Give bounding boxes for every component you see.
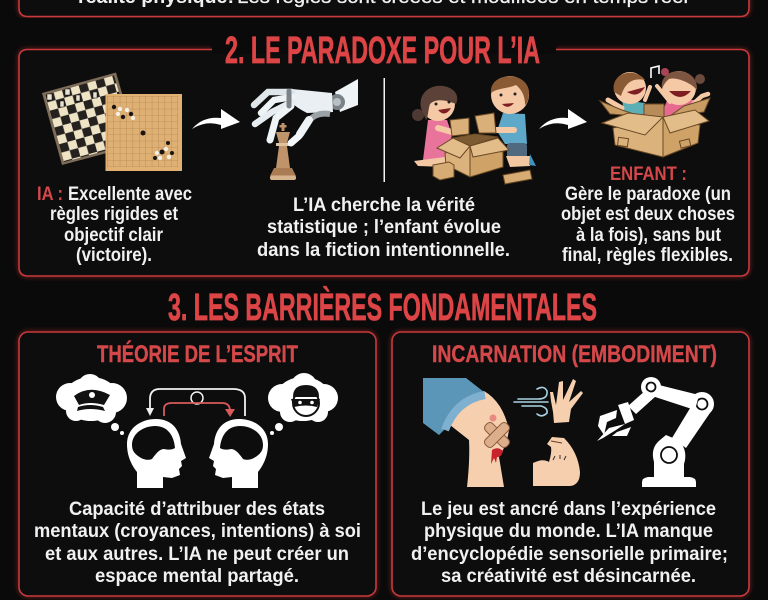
panel: embodiment (392, 332, 749, 596)
text: child strength (561, 164, 735, 266)
arrow: boards to robot (192, 109, 240, 129)
text: child strength: objet est deux choses (561, 204, 735, 225)
icon: injured knee (423, 378, 511, 487)
icon: chess king (270, 123, 296, 180)
text: theory of mind description: et aux autres. L’IA ne peut créer un (45, 544, 349, 565)
text: theory of mind description (34, 499, 361, 587)
icon: wind (514, 387, 548, 416)
icon: cardboard boxes (433, 113, 532, 184)
arrow: robot to child box (539, 109, 587, 129)
text: embodiment description: physique du monde. L’IA manque (424, 521, 713, 542)
panel: paradox (19, 30, 749, 276)
icon: flexed arm (533, 437, 580, 486)
text: theory of mind description: Capacité d’attribuer des états (69, 499, 325, 520)
panel: top section remainder (19, 0, 749, 16)
heading: theory of mind: THÉORIE DE L’ESPRIT (97, 340, 298, 368)
arrow: white loop to left head (146, 389, 245, 416)
icon: boy in box (608, 72, 650, 118)
icon: right head with brain (209, 419, 268, 488)
icon: boy (491, 76, 536, 167)
text: AI strength: IA : (37, 184, 63, 205)
text: embodiment description (411, 499, 728, 587)
text: embodiment description: sa créativité est désincarnée. (441, 566, 696, 587)
text: theory of mind description: mentaux (croyances, intentions) à soi (34, 521, 361, 542)
text: comparison: statistique ; l’enfant évolue (267, 217, 501, 238)
text: child strength: final, règles flexibles. (562, 245, 733, 266)
icon: robot hand and chess king (254, 79, 358, 180)
icon: girl in box (657, 68, 708, 118)
text: AI strength: Excellente avec (68, 184, 192, 205)
icon: chess board and go board (42, 72, 182, 171)
text: AI strength: (victoire). (76, 245, 152, 266)
text: AI strength: objectif clair (64, 225, 164, 246)
arrow: red loop to right head (164, 403, 235, 417)
panel: theory of mind (19, 332, 376, 596)
icon: thought cloud with burglar (268, 373, 338, 435)
icon: children inside a box (600, 66, 710, 157)
text: embodiment description: Le jeu est ancré dans l’expérience (421, 499, 716, 520)
text: AI strength (37, 184, 192, 266)
text: AI strength: règles rigides et (50, 204, 179, 225)
icon: music note (651, 66, 659, 78)
text: comparison: dans la fiction intentionnelle. (257, 240, 510, 261)
icon: thought cloud with police cap (56, 374, 127, 435)
icon: girl (412, 86, 457, 167)
text: child strength: à la fois), sans but (576, 225, 722, 246)
icon: left head with brain (127, 419, 186, 488)
icon: hand (550, 379, 583, 423)
heading: section 2: 2. LE PARADOXE POUR L’IA (225, 30, 540, 72)
icon: children playing with boxes (412, 76, 536, 184)
divider: vertical line (384, 78, 385, 182)
text: theory of mind description: espace mental partagé. (95, 566, 299, 587)
text: embodiment description: d’encyclopédie sensorielle primaire; (411, 544, 728, 565)
icon: open cardboard box (600, 98, 710, 157)
text: top panel last line (78, 0, 688, 8)
icon: robot arm (597, 377, 714, 487)
text: comparison: L’IA cherche la vérité (293, 195, 475, 216)
text: child strength: ENFANT : (610, 164, 687, 185)
text: child strength: Gère le paradoxe (un (565, 184, 731, 205)
text: comparison (257, 195, 510, 261)
